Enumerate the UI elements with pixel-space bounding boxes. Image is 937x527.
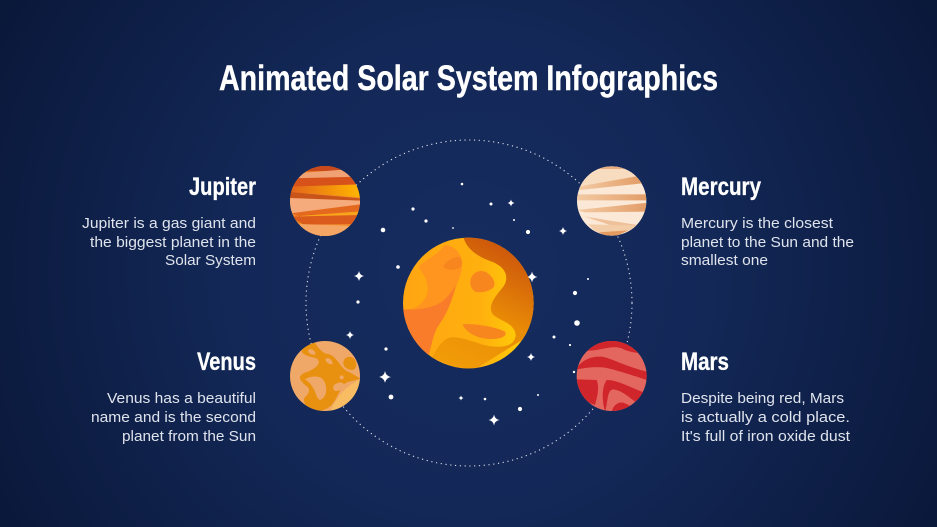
icon: planet Venus (290, 341, 360, 411)
icon: sun (402, 237, 538, 373)
text block: Venus: Venus has a beautiful (107, 391, 256, 407)
text block: Venus (91, 391, 256, 445)
text block: Mercury: planet to the Sun and the (681, 235, 854, 251)
heading: Jupiter: Jupiter (189, 173, 256, 201)
text block: Jupiter: the biggest planet in the (90, 235, 256, 251)
heading: Venus: Venus (197, 348, 256, 376)
heading: Mars: Mars (681, 348, 729, 376)
icon: planet Mercury (575, 165, 648, 238)
text block: Mercury: Mercury is the closest (681, 216, 833, 232)
text block: Mars (681, 391, 850, 445)
text block: Mars: Despite being red, Mars (681, 391, 844, 407)
text block: Mercury: smallest one (681, 253, 768, 269)
star field (346, 183, 589, 426)
text block: Jupiter: Jupiter is a gas giant and (82, 216, 256, 232)
text block: Jupiter: Solar System (165, 253, 256, 269)
text block: Venus: planet from the Sun (122, 429, 256, 445)
text block: Mars: is actually a cold place. (681, 410, 850, 426)
icon: planet Mars (576, 341, 647, 411)
text block: Venus: name and is the second (91, 410, 256, 426)
title: Animated Solar System Infographics (219, 58, 718, 98)
text block: Mercury (681, 216, 854, 269)
text block: Mars: It's full of iron oxide dust (681, 429, 850, 445)
icon: planet Jupiter (290, 166, 360, 236)
orbit ring (306, 140, 632, 466)
text block: Jupiter (82, 216, 256, 269)
heading: Mercury: Mercury (681, 173, 761, 201)
